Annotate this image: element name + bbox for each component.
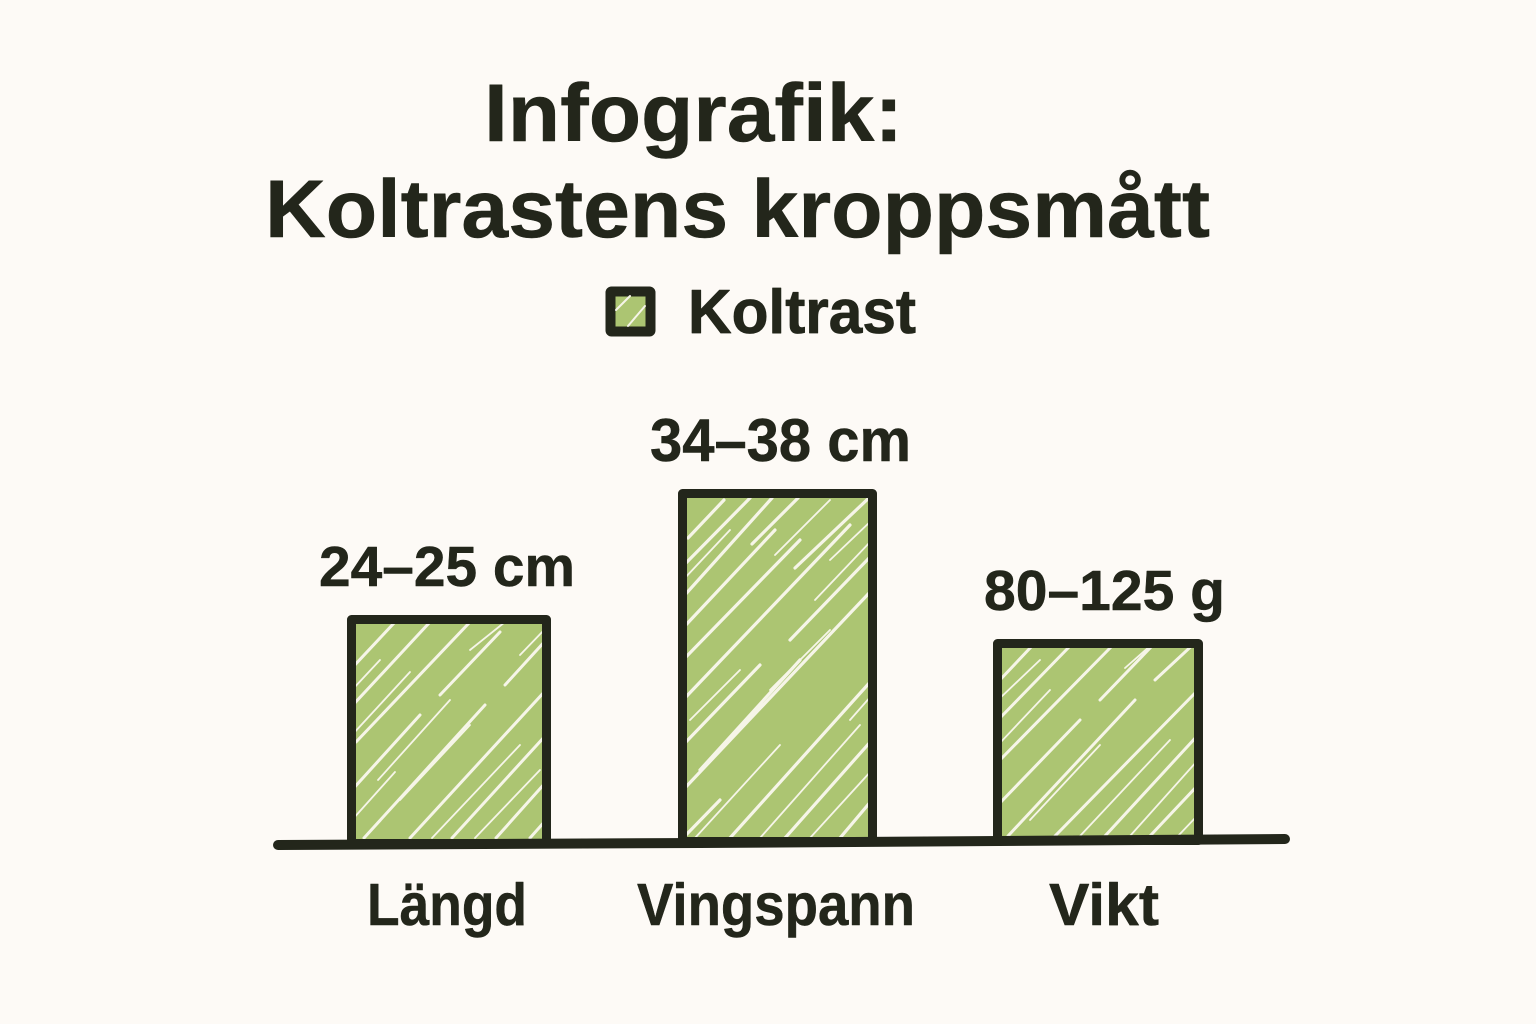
legend swatch — [610, 292, 650, 332]
value label: Längd: 24–25 cm — [319, 535, 575, 599]
category label: Längd: Längd — [367, 872, 527, 938]
value label: Vingspann: 34–38 cm — [650, 407, 911, 474]
title — [265, 68, 1210, 255]
title: Infografik: — [484, 68, 903, 159]
bar: Vikt — [998, 640, 1198, 840]
bar: Längd — [352, 620, 546, 844]
value label: Vikt: 80–125 g — [984, 559, 1225, 623]
category label: Vingspann: Vingspann — [637, 872, 915, 938]
bar: Vingspann — [682, 494, 872, 842]
bar chart — [278, 407, 1285, 938]
x axis — [278, 839, 1285, 845]
legend label: Koltrast — [688, 278, 916, 347]
category label: Vikt: Vikt — [1049, 872, 1159, 938]
legend — [610, 278, 916, 347]
title: Koltrastens kroppsmått — [265, 164, 1210, 255]
